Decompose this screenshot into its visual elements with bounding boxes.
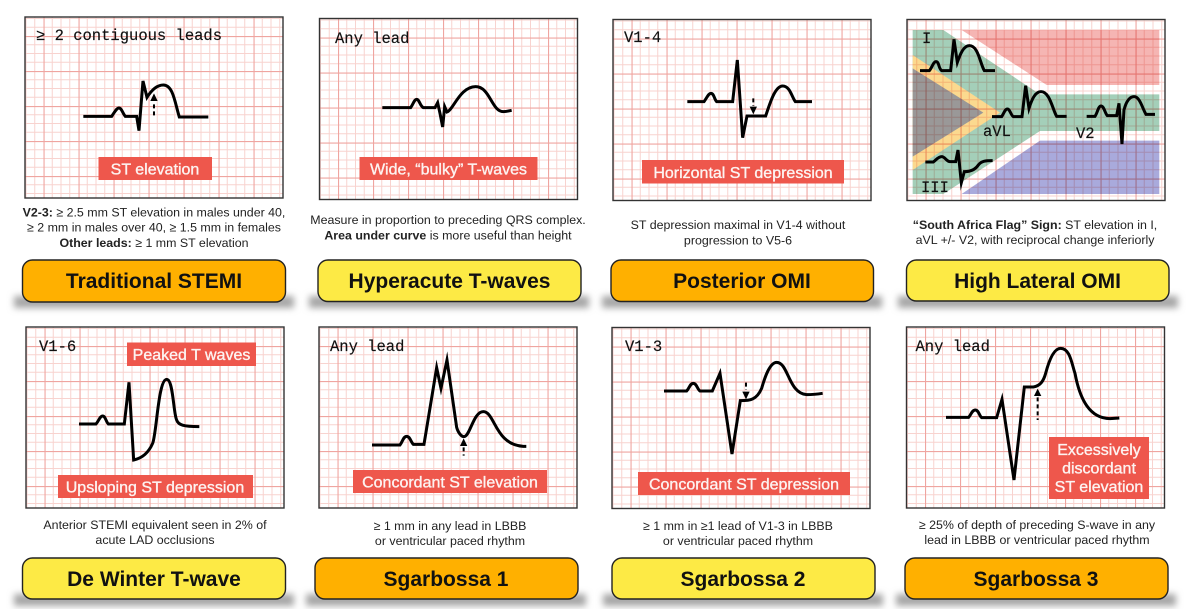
lead label: ≥ 2 contiguous leads	[36, 27, 222, 45]
caption: lead in LBBB or ventricular paced rhythm	[924, 533, 1150, 547]
tag: upsloping ST depression	[58, 475, 253, 498]
caption: acute LAD occlusions	[95, 533, 215, 547]
tag: Horizontal ST depression	[653, 165, 833, 182]
caption: progression to V5-6	[684, 234, 792, 248]
lead label: V1-3	[625, 338, 662, 356]
arrow	[150, 93, 158, 117]
ECG trace	[664, 362, 823, 454]
panel: High Lateral OMI	[898, 20, 1178, 308]
tag: Excessively	[1057, 442, 1141, 459]
tag	[353, 470, 547, 493]
name pill: High Lateral OMI	[954, 270, 1121, 293]
name pill	[612, 558, 875, 599]
tag	[98, 157, 212, 180]
tag	[638, 472, 850, 495]
name pill: De Winter T-wave	[67, 568, 241, 591]
lead labels: aVL	[983, 123, 1011, 141]
tag: ST elevation	[1055, 479, 1143, 496]
name pill: Hyperacute T-waves	[349, 270, 550, 293]
panel: Traditional STEMI	[14, 17, 294, 308]
arrow	[1034, 389, 1041, 420]
arrow	[750, 98, 757, 114]
lead labels: V2	[1076, 125, 1095, 143]
name pill shadow	[602, 296, 882, 308]
tag: upsloping ST depression: Upsloping ST depression	[66, 480, 244, 496]
lead label: V1-6	[39, 338, 76, 356]
caption: Other leads: ≥ 1 mm ST elevation	[59, 236, 249, 250]
ECG trace	[382, 87, 512, 127]
name pill	[315, 558, 578, 599]
name pill	[906, 260, 1169, 301]
caption: ≥ 25% of depth of preceding S-wave in any	[919, 518, 1156, 532]
caption: Anterior STEMI equivalent seen in 2% of	[43, 518, 267, 532]
tag	[360, 157, 538, 180]
ECG trace	[946, 348, 1119, 480]
arrow	[742, 383, 750, 399]
tag: discordant	[1062, 460, 1136, 478]
name pill shadow	[14, 296, 294, 308]
name pill shadow	[306, 594, 586, 606]
name pill shadow	[898, 296, 1178, 308]
ECG trace	[372, 360, 526, 446]
caption: aVL +/- V2, with reciprocal change inferiorly	[916, 233, 1155, 247]
name pill: Sgarbossa 2	[681, 568, 805, 591]
flag background	[913, 30, 1159, 194]
name pill: Traditional STEMI	[66, 270, 242, 293]
arrow	[460, 438, 467, 456]
name pill shadow	[896, 594, 1176, 606]
lead label: Any lead	[330, 338, 404, 356]
tag: peaked T waves: Peaked T waves	[133, 347, 250, 364]
name pill	[22, 260, 286, 302]
tag: ST elevation	[111, 162, 199, 178]
ECG trace	[83, 81, 208, 131]
lead labels: I	[922, 30, 931, 48]
lead labels: III	[921, 179, 949, 197]
tag: Concordant ST depression	[649, 476, 839, 494]
caption: or ventricular paced rhythm	[375, 534, 525, 548]
ECG trace	[79, 379, 199, 460]
panel: Sgarbossa 1	[306, 327, 586, 606]
name pill	[905, 558, 1168, 599]
panel: De Winter T-wave	[14, 327, 294, 606]
caption: Area under curve is more useful than height	[324, 228, 572, 242]
caption: ≥ 1 mm in ≥1 lead of V1-3 in LBBB	[643, 519, 833, 533]
lead label: Any lead	[916, 338, 990, 356]
caption: or ventricular paced rhythm	[663, 534, 813, 548]
name pill shadow	[603, 594, 883, 606]
lead label: V1-4	[624, 29, 661, 47]
panel: Sgarbossa 2	[603, 328, 883, 606]
caption: V2-3: ≥ 2.5 mm ST elevation in males under 40,	[23, 206, 285, 220]
caption: Measure in proportion to preceding QRS complex.	[310, 213, 586, 227]
name pill: Sgarbossa 1	[384, 568, 509, 591]
tag	[1049, 437, 1149, 499]
ECG traces	[920, 39, 1155, 183]
panel: Sgarbossa 3	[896, 327, 1176, 606]
tag: Wide, “bulky” T-waves	[370, 162, 527, 178]
name pill: Posterior OMI	[673, 270, 811, 293]
name pill	[22, 558, 286, 599]
caption: ST depression maximal in V1-4 without	[631, 218, 846, 232]
ECG trace	[687, 60, 812, 138]
lead label: Any lead	[335, 30, 409, 48]
caption: ≥ 2 mm in males over 40, ≥ 1.5 mm in females	[27, 220, 281, 234]
name pill: Sgarbossa 3	[974, 568, 1098, 591]
panel: Hyperacute T-waves	[309, 18, 589, 308]
tag: Concordant ST elevation	[362, 474, 538, 492]
name pill	[611, 260, 874, 302]
tag: peaked T waves	[127, 342, 256, 366]
panel: Posterior OMI	[602, 20, 882, 308]
name pill shadow	[309, 296, 589, 308]
tag	[642, 160, 844, 184]
name pill shadow	[14, 594, 294, 606]
caption: ≥ 1 mm in any lead in LBBB	[374, 519, 526, 533]
name pill	[318, 260, 581, 302]
lead labels	[921, 30, 1095, 197]
caption: “South Africa Flag” Sign: ST elevation in I,	[913, 218, 1157, 232]
